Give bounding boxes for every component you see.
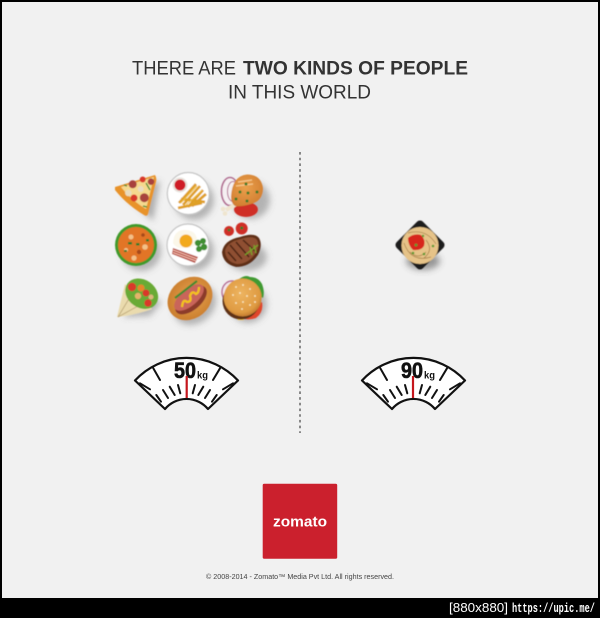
title: TWO KINDS OF PEOPLE	[243, 58, 468, 80]
watermark: [880x880]	[449, 601, 508, 615]
icon: wrap	[117, 272, 164, 317]
icon: single pasta plate	[394, 219, 446, 271]
needle	[412, 376, 414, 398]
food grid: many dishes	[115, 172, 270, 333]
zomato logo: zomato	[273, 514, 327, 530]
zomato logo	[263, 484, 337, 559]
icon: soup bowl	[115, 224, 161, 271]
unit kg: kg	[197, 370, 208, 382]
weight value 50: 50	[174, 358, 196, 383]
title	[132, 58, 468, 104]
icon: fries plate	[167, 172, 214, 220]
weight value 90: 90	[401, 358, 423, 383]
weighing scale: 90kg	[362, 358, 465, 409]
icon: eggs and bacon plate	[167, 224, 214, 271]
icon: hot dog	[159, 268, 224, 333]
watermark	[449, 601, 595, 616]
icon: pizza slice	[115, 175, 160, 221]
icon: steak with tomatoes	[222, 222, 267, 271]
copyright text: © 2008-2014 - Zomato™ Media Pvt Ltd. All rights reserved.	[206, 573, 394, 581]
unit kg: kg	[424, 370, 435, 382]
icon: burger	[222, 276, 267, 323]
title: THERE ARE	[132, 58, 236, 80]
title: IN THIS WORLD	[228, 82, 371, 104]
needle	[186, 376, 188, 398]
icon: grilled chicken	[221, 174, 270, 219]
dashed divider	[299, 152, 301, 433]
weighing scale: 50kg	[135, 358, 238, 409]
